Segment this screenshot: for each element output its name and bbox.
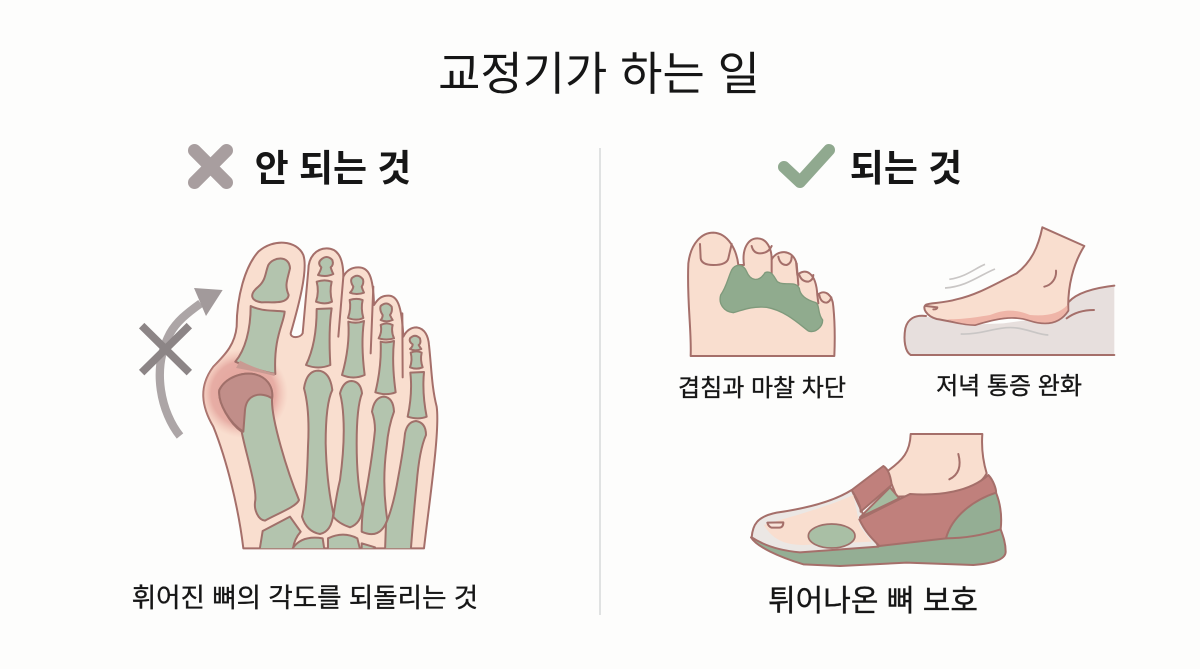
ankle and toenail details — [926, 271, 1056, 309]
illustration: toe separator — [688, 233, 835, 356]
heading: what it can do: 되는 것 — [850, 148, 962, 189]
illustration: protective shoe — [751, 434, 1006, 566]
tongue strap shadow — [860, 487, 899, 517]
cushion — [905, 286, 1114, 355]
caption: bone protection: 튀어나온 뼈 보호 — [768, 585, 978, 618]
ankle line — [949, 454, 960, 479]
icon: cross mark — [194, 150, 226, 182]
icon: check mark — [784, 150, 829, 182]
title: 교정기가 하는 일 — [438, 48, 760, 100]
toenails — [700, 244, 831, 303]
sole — [751, 529, 1006, 566]
toe separators — [338, 277, 403, 377]
illustration: bunion foot skeleton — [142, 243, 437, 552]
forefoot — [688, 233, 835, 356]
leg — [887, 434, 987, 497]
inflamed joint glow — [204, 352, 285, 435]
visible foot — [764, 495, 872, 545]
caption: overlap and friction: 겹침과 마찰 차단 — [678, 375, 846, 402]
foot — [924, 227, 1084, 325]
heel counter — [946, 493, 1001, 538]
cushion outline — [905, 286, 1114, 355]
arrow: angle correction — [160, 303, 201, 436]
sole shading — [947, 305, 1068, 324]
arrowhead — [194, 288, 223, 316]
clear toe shell — [752, 490, 878, 552]
inflamed proximal base — [236, 361, 275, 376]
foot outline — [203, 243, 437, 548]
main upper — [859, 475, 996, 546]
toenail — [767, 522, 783, 528]
toe dividers — [772, 259, 818, 303]
caption: night pain: 저녁 통증 완화 — [936, 373, 1082, 400]
heading: what it cannot do: 안 되는 것 — [255, 148, 411, 189]
front strap — [852, 466, 892, 512]
green pad over bunion — [808, 524, 855, 548]
illustration: foot on cushion — [905, 227, 1114, 355]
large cross over arrow — [142, 326, 189, 373]
caption: left: 휘어진 뼈의 각도를 되돌리는 것 — [132, 583, 478, 613]
green silicone spacer — [720, 265, 823, 332]
bones — [219, 257, 427, 552]
motion lines — [945, 264, 1048, 335]
inflamed bone head — [219, 374, 272, 432]
